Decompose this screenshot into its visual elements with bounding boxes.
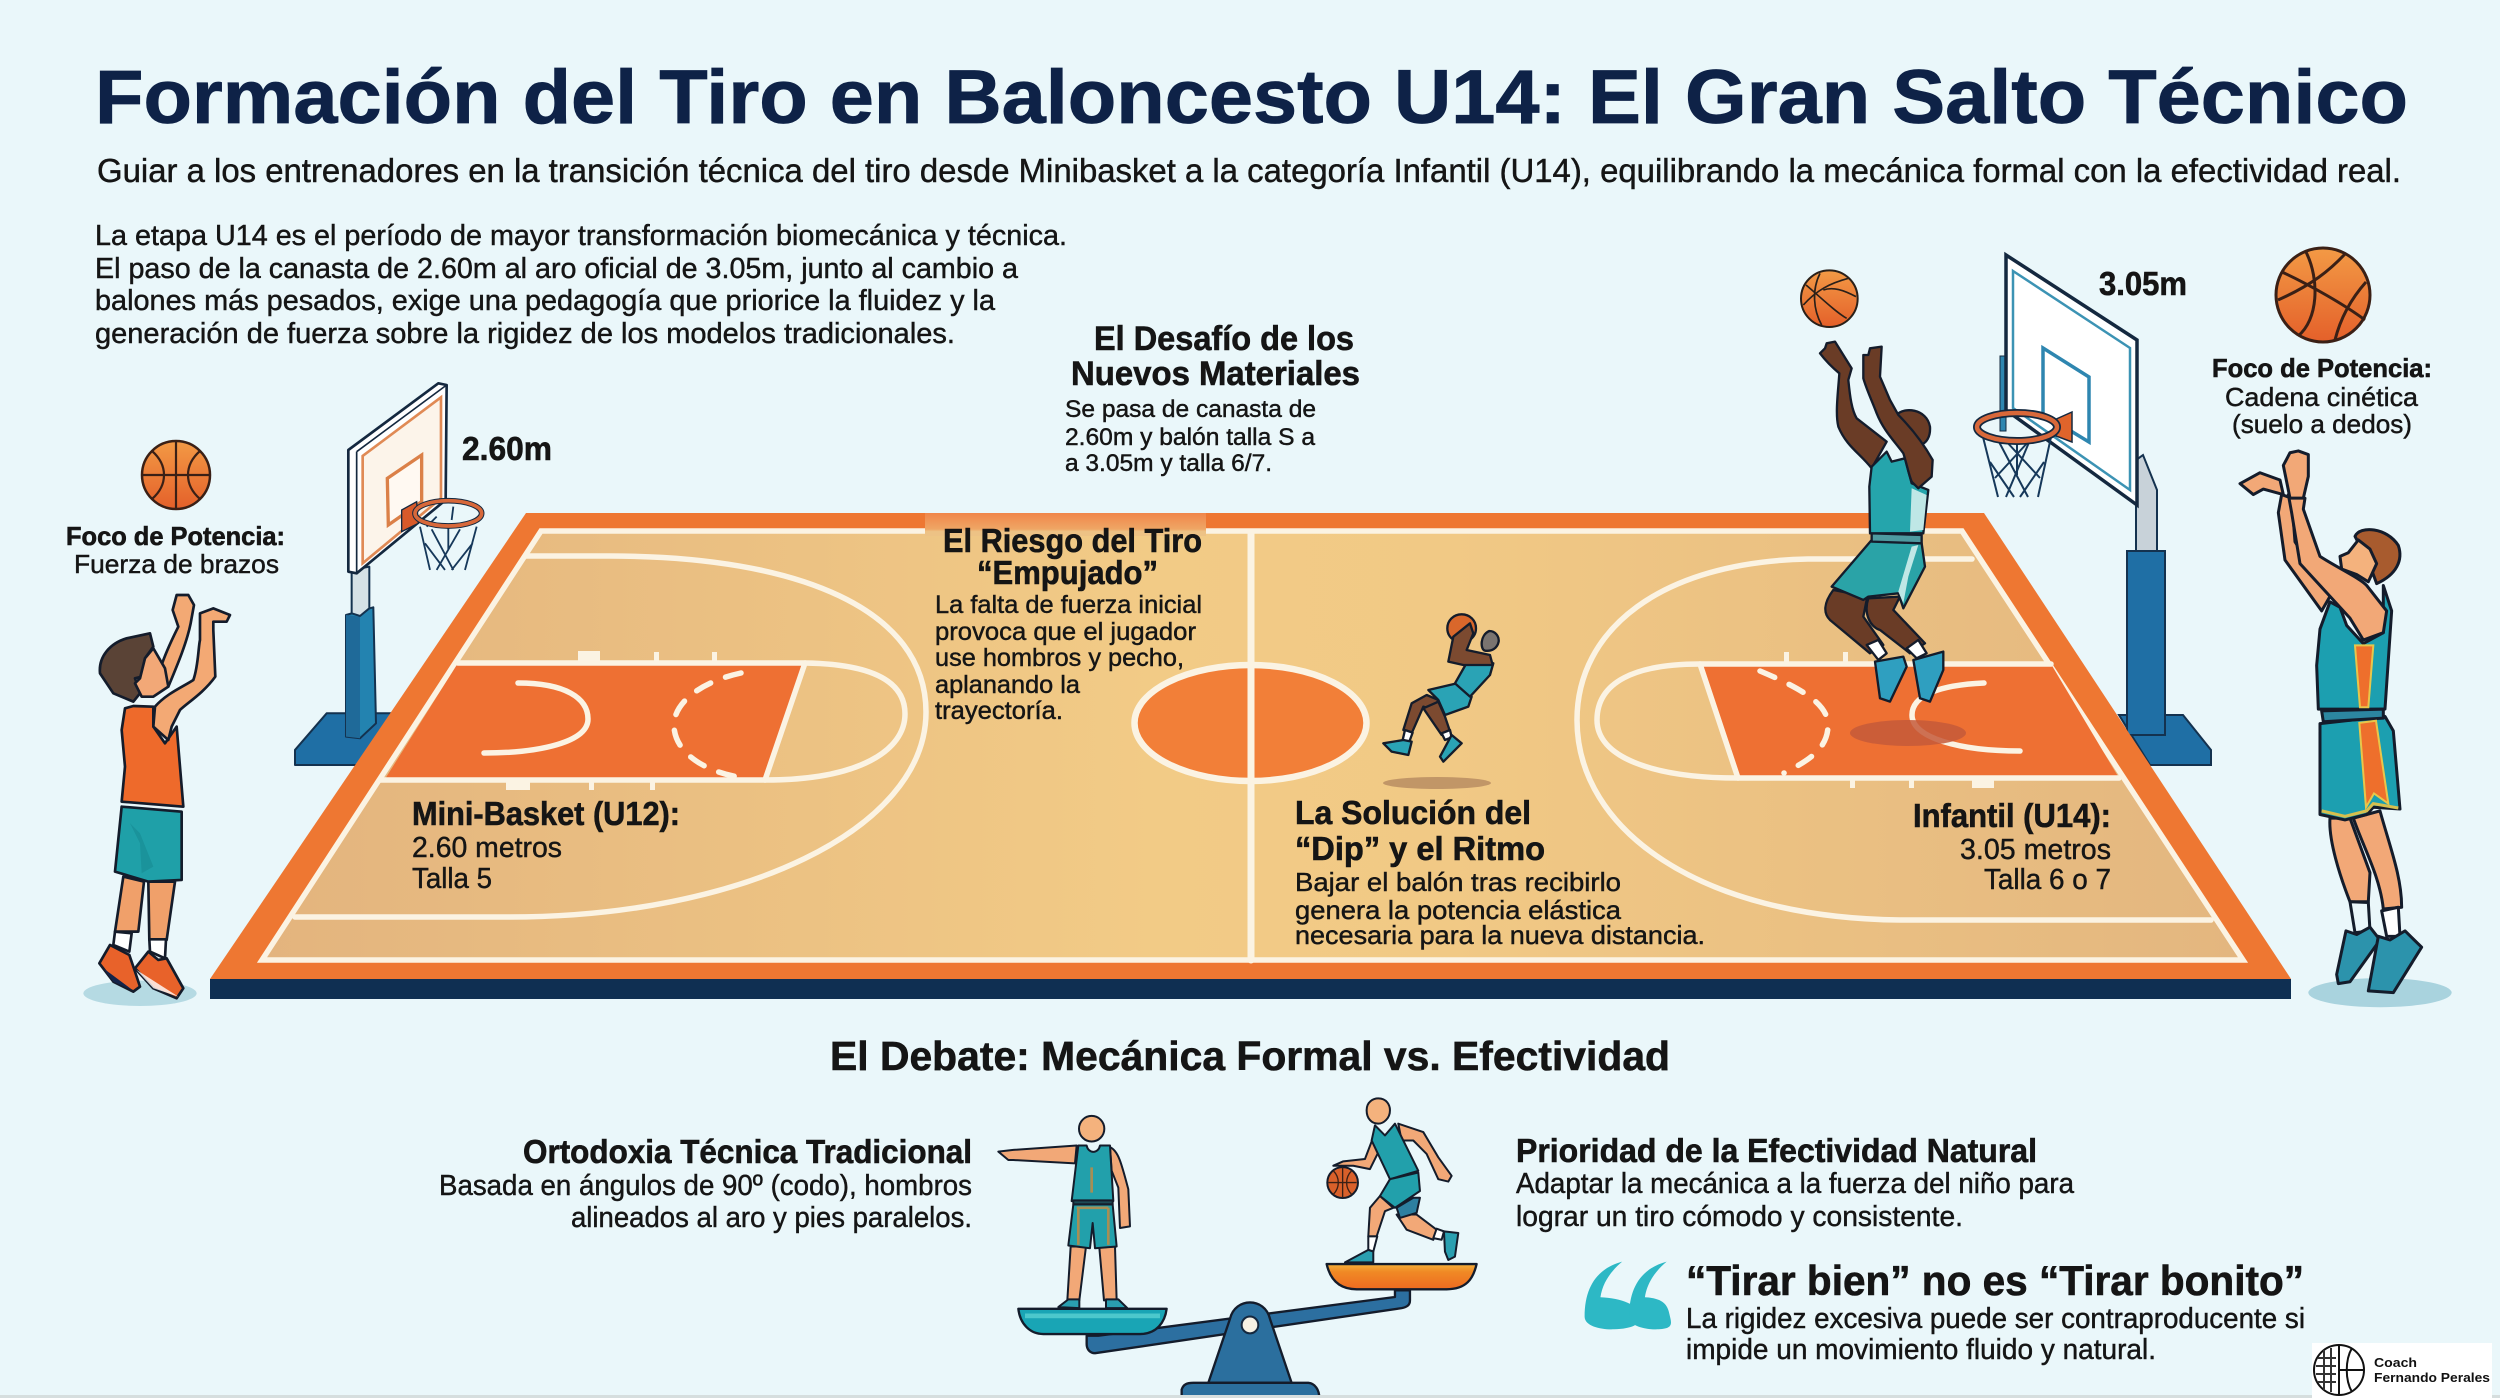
- dribbling figure: [1327, 1098, 1458, 1262]
- solucion dip text: [1295, 867, 1705, 950]
- solucion dip heading: [1295, 794, 1545, 867]
- left ball: [142, 441, 210, 509]
- basketball court: [210, 513, 2291, 999]
- El Desafío heading: Nuevos Materiales: [1071, 355, 1360, 393]
- solucion dip text: genera la potencia elástica: [1295, 895, 1622, 925]
- riesgo text: [935, 591, 1202, 725]
- infantil label: Infantil (U14):: [1913, 797, 2111, 834]
- jumping shooter: [1801, 270, 1943, 702]
- left shooter boy: [83, 595, 230, 1006]
- prioridad text: Prioridad de la Efectividad Natural: [1516, 1132, 2037, 1169]
- riesgo text: provoca que el jugador: [935, 618, 1196, 646]
- small player shadow: [1383, 777, 1491, 789]
- intro text block: balones más pesados, exige una pedagogía que priorice la fluidez y la: [95, 285, 996, 317]
- foco de potencia right: (suelo a dedos): [2232, 409, 2412, 439]
- riesgo text: aplanando la: [935, 671, 1080, 699]
- solucion dip text: Bajar el balón tras recibirlo: [1295, 867, 1621, 897]
- riesgo heading: El Riesgo del Tiro: [943, 522, 1202, 559]
- fulcrum: [1182, 1302, 1319, 1398]
- intro text block: La etapa U14 es el período de mayor transformación biomecánica y técnica.: [95, 220, 1067, 252]
- subtitle: Guiar a los entrenadores en la transición técnica del tiro desde Minibasket a la categoría Infantil (U14), equilibrando la mecánica formal con la efectividad real.: [97, 152, 2401, 189]
- riesgo text: trayectoría.: [935, 697, 1063, 725]
- left hoop 2.60m: [295, 383, 482, 765]
- right hoop 3.05m: [1977, 255, 2211, 765]
- jumper shadow: [1850, 720, 1966, 746]
- right shooter: [2240, 451, 2452, 1007]
- foco de potencia right: Cadena cinética: [2225, 382, 2419, 412]
- mini-basket label: 2.60 metros: [412, 832, 562, 864]
- El Desafío heading: El Desafío de los: [1094, 320, 1354, 358]
- prioridad text: Adaptar la mecánica a la fuerza del niño para: [1516, 1168, 2075, 1200]
- foco de potencia left: Foco de Potencia:: [66, 521, 285, 551]
- mini-basket label: [412, 795, 680, 895]
- quote text: [1686, 1257, 2305, 1366]
- small dip player: [1383, 614, 1499, 762]
- mini-basket label: Mini-Basket (U12):: [412, 795, 680, 832]
- right key: [1700, 664, 2119, 778]
- riesgo heading: [943, 522, 1202, 591]
- El Desafío text: Se pasa de canasta de: [1065, 396, 1316, 423]
- infantil label: Talla 6 o 7: [1984, 864, 2111, 896]
- foco de potencia left: Fuerza de brazos: [74, 549, 279, 579]
- quote text: impide un movimiento fluido y natural.: [1686, 1334, 2156, 1366]
- intro text block: generación de fuerza sobre la rigidez de los modelos tradicionales.: [95, 318, 955, 350]
- riesgo text: La falta de fuerza inicial: [935, 591, 1202, 619]
- quote text: “Tirar bien” no es “Tirar bonito”: [1686, 1257, 2304, 1304]
- infantil label: [1913, 797, 2111, 896]
- ortodoxia text: Ortodoxia Técnica Tradicional: [523, 1133, 972, 1170]
- prioridad text: [1516, 1132, 2075, 1233]
- left key: [385, 663, 805, 779]
- debate heading: El Debate: Mecánica Formal vs. Efectividad: [830, 1033, 1670, 1079]
- El Desafío text: [1065, 396, 1316, 477]
- quote text: La rigidez excesiva puede ser contraproducente si: [1686, 1303, 2305, 1335]
- El Desafío text: 2.60m y balón talla S a: [1065, 424, 1316, 451]
- foco de potencia right: Foco de Potencia:: [2212, 353, 2432, 383]
- center circle: [1134, 665, 1366, 781]
- foco de potencia right: [2212, 353, 2432, 439]
- balance scale with two figures: [998, 1098, 1477, 1398]
- right bowl: [1327, 1264, 1477, 1289]
- prioridad text: lograr un tiro cómodo y consistente.: [1516, 1201, 1963, 1233]
- ortodoxia text: alineados al aro y pies paralelos.: [571, 1202, 972, 1234]
- El Desafío text: a 3.05m y talla 6/7.: [1065, 450, 1272, 477]
- label 2.60m: 2.60m: [462, 430, 552, 467]
- intro text block: [95, 220, 1067, 350]
- coach logo: Coach: [2374, 1355, 2417, 1370]
- solucion dip heading: “Dip” y el Ritmo: [1295, 830, 1545, 867]
- riesgo text: use hombros y pecho,: [935, 644, 1184, 672]
- ortodoxia text: [439, 1133, 972, 1234]
- intro text block: El paso de la canasta de 2.60m al aro oficial de 3.05m, junto al cambio a: [95, 253, 1019, 285]
- left bowl: [1018, 1309, 1167, 1334]
- quote mark icon: [1585, 1262, 1671, 1329]
- solucion dip text: necesaria para la nueva distancia.: [1295, 920, 1705, 950]
- jumper ball: [1801, 270, 1858, 327]
- title: Formación del Tiro en Baloncesto U14: El Gran Salto Técnico: [95, 55, 2408, 140]
- riesgo heading: “Empujado”: [977, 554, 1158, 591]
- scale beam: [1087, 1290, 1410, 1353]
- solucion dip heading: La Solución del: [1295, 794, 1531, 831]
- coach logo: Fernando Perales: [2374, 1370, 2490, 1385]
- formal stance figure: [998, 1116, 1130, 1308]
- El Desafío heading: [1071, 320, 1360, 393]
- mini-basket label: Talla 5: [412, 863, 492, 895]
- right ball: [2276, 248, 2370, 342]
- foco de potencia left: [66, 521, 285, 579]
- coach logo: [2312, 1343, 2492, 1398]
- infantil label: 3.05 metros: [1960, 834, 2111, 866]
- label 3.05m: 3.05m: [2099, 265, 2187, 302]
- ortodoxia text: Basada en ángulos de 90º (codo), hombros: [439, 1170, 972, 1202]
